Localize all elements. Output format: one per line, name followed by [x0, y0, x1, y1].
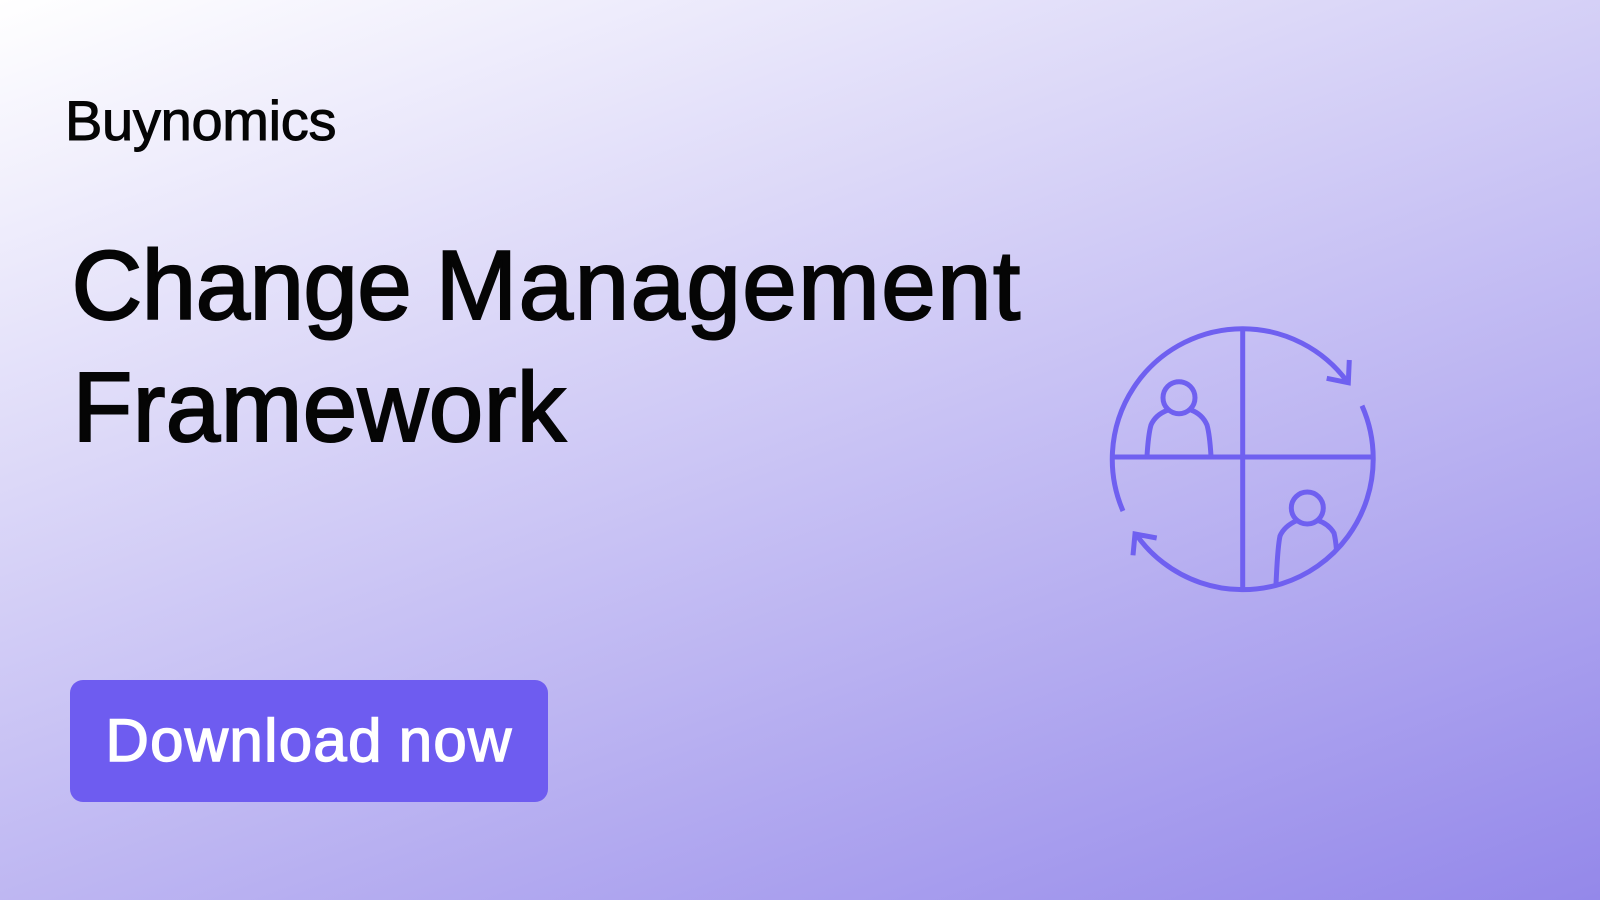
button: Download now [70, 680, 548, 802]
quadrant cross lines [1112, 329, 1373, 590]
logo: Buynomics: Buynomics [65, 88, 336, 152]
button label: Download now [106, 707, 513, 774]
circle arc with arrow, top [1112, 329, 1349, 511]
title: Change Management Framework: Framework [72, 352, 566, 462]
title: Change Management Framework [72, 230, 1022, 462]
person bottom-right [1276, 492, 1336, 584]
title: Change Management Framework: Change Management [72, 230, 1022, 340]
circle arc with arrow, bottom [1133, 406, 1373, 590]
person top-left [1147, 382, 1211, 456]
